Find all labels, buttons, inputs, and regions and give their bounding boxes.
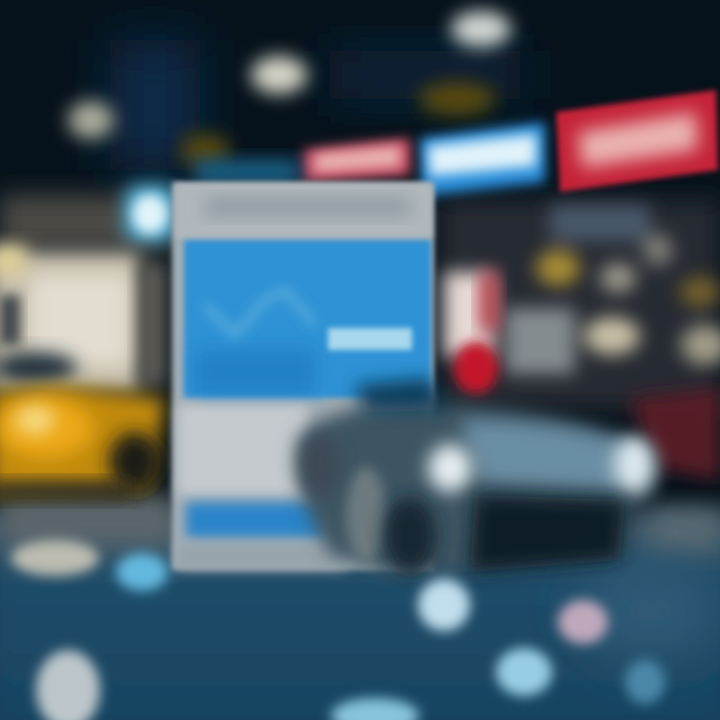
red car, right xyxy=(630,388,720,480)
left storefront xyxy=(0,245,166,392)
cyan sign xyxy=(124,160,300,242)
right side showroom lights xyxy=(505,205,720,374)
front grille xyxy=(470,495,625,572)
lower blue bar xyxy=(186,502,326,538)
grey panel xyxy=(178,405,308,495)
floor xyxy=(0,495,720,720)
yellow car xyxy=(0,386,165,500)
red and white banner xyxy=(444,272,498,394)
headlights xyxy=(428,444,472,492)
chart label xyxy=(328,328,412,350)
hood xyxy=(460,420,640,490)
ceiling lights xyxy=(68,11,511,166)
chart line xyxy=(205,290,315,335)
wheel xyxy=(346,467,386,563)
pink sign xyxy=(303,138,410,182)
board header xyxy=(176,184,432,238)
blue chart panel xyxy=(184,240,431,398)
floor light reflections xyxy=(11,540,665,720)
windshield xyxy=(355,378,445,412)
red sign xyxy=(556,90,718,192)
footer strip xyxy=(176,544,346,570)
blue sign xyxy=(420,122,545,196)
silver-blue car xyxy=(297,378,657,575)
board backing xyxy=(172,182,434,570)
info board xyxy=(172,182,434,570)
